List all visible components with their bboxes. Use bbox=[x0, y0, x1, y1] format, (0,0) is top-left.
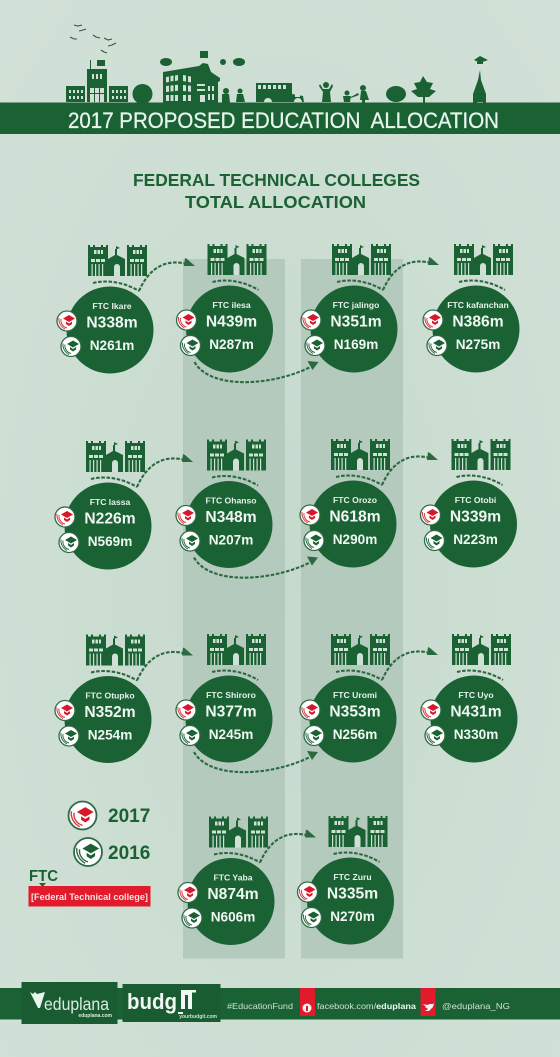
card: FTC Lassa: FTC lassa bbox=[90, 497, 131, 507]
arrow: Uromi to Uyo bbox=[382, 647, 438, 680]
logo: budgIT: yourbudgit.com bbox=[179, 1014, 218, 1020]
card: FTC Uyo: N431m bbox=[450, 704, 502, 720]
card: FTC Otobi: FTC Otobi bbox=[455, 495, 496, 505]
card: FTC Ikare bbox=[57, 245, 154, 374]
card: FTC Ohanso: FTC Ohanso bbox=[205, 496, 257, 506]
card: FTC Ohanso: N207m bbox=[209, 532, 253, 548]
card: FTC Uromi bbox=[300, 634, 396, 762]
card: FTC Kafanchan: N275m bbox=[456, 337, 500, 352]
card: FTC Otupko: N254m bbox=[88, 728, 132, 742]
card: FTC Yaba: N606m bbox=[211, 910, 255, 924]
legend item: 2017: 2017 bbox=[108, 806, 150, 827]
card: FTC Orozo bbox=[300, 439, 396, 568]
card: FTC Ohanso: N348m bbox=[205, 509, 257, 526]
card: FTC Ohanso bbox=[176, 440, 272, 568]
card: FTC Ilesa: N287m bbox=[209, 337, 254, 352]
heading bbox=[133, 170, 420, 212]
icon: main school building bbox=[163, 51, 220, 103]
icon: school bus bbox=[256, 83, 304, 106]
icon: college building bbox=[66, 60, 128, 102]
legend bbox=[28, 802, 150, 906]
card: FTC Otupko bbox=[55, 634, 152, 763]
card: FTC Otobi: N339m bbox=[450, 508, 501, 526]
card: FTC Ilesa bbox=[176, 244, 273, 372]
logo: eduplana: eduplana.com bbox=[78, 1013, 113, 1019]
icon: trees bbox=[386, 76, 436, 103]
card: FTC Yaba: FTC Yaba bbox=[213, 872, 253, 882]
card: FTC Uyo: FTC Uyo bbox=[458, 690, 494, 700]
card: FTC Shiroro bbox=[176, 634, 272, 762]
card: FTC Kafanchan bbox=[423, 244, 520, 372]
arrow: Ikare to Ilesa bbox=[139, 258, 195, 291]
card: FTC Zuru: N270m bbox=[330, 909, 375, 924]
card: FTC Otupko: FTC Otupko bbox=[85, 690, 135, 700]
heading: FEDERAL TECHNICAL COLLEGES bbox=[133, 170, 420, 190]
card: FTC Shiroro: N245m bbox=[209, 727, 253, 742]
card: FTC Jalingo: FTC jalingo bbox=[333, 300, 379, 310]
arrow: Shiroro to Uromi bbox=[194, 751, 318, 772]
facebook link: facebook.com/ eduplana bbox=[317, 1001, 416, 1011]
card: FTC Otobi bbox=[420, 439, 517, 568]
arrow: Otupko to Shiroro bbox=[137, 648, 193, 680]
icon: tree bbox=[132, 84, 152, 104]
panel: shaded column left bbox=[183, 259, 285, 958]
card: FTC Jalingo bbox=[301, 244, 398, 372]
icon: children with hands raised bbox=[319, 82, 369, 103]
twitter handle: @eduplana_NG bbox=[442, 1001, 510, 1011]
header illustration: skyline bbox=[66, 25, 488, 109]
card: FTC Zuru: N335m bbox=[327, 886, 378, 902]
header band with title: 2017 PROPOSED EDUCATION ALLOCATION bbox=[68, 108, 499, 133]
logo: eduplana: eduplana bbox=[44, 994, 109, 1014]
abbreviation label: Federal Technical college: [Federal Technical college] bbox=[31, 892, 148, 903]
arrow: Yaba to Zuru bbox=[260, 830, 316, 862]
card: FTC Ikare: N261m bbox=[90, 338, 134, 353]
card: FTC Lassa: N569m bbox=[88, 534, 132, 549]
logo: budgIT bbox=[122, 984, 220, 1022]
panel: shaded column right bbox=[301, 259, 403, 958]
card: FTC Otupko: N352m bbox=[84, 704, 136, 721]
card: FTC Uromi: FTC Uromi bbox=[333, 690, 377, 700]
arrow: Ilesa to Jalingo bbox=[194, 361, 318, 382]
card: FTC Ilesa: FTC ilesa bbox=[212, 300, 251, 310]
card: FTC Jalingo: N169m bbox=[334, 337, 378, 352]
icon: twitter bbox=[420, 988, 436, 1016]
logo: eduplana bbox=[22, 982, 118, 1024]
card: FTC Kafanchan: FTC kafanchan bbox=[447, 300, 509, 310]
card: FTC Shiroro: FTC Shiroro bbox=[206, 690, 256, 700]
icon: clouds bbox=[160, 58, 245, 66]
card: FTC Zuru: FTC Zuru bbox=[333, 872, 372, 882]
card: FTC Shiroro: N377m bbox=[205, 704, 257, 720]
icon: steeple with cap bbox=[473, 56, 488, 109]
card: FTC Ikare: FTC Ikare bbox=[92, 301, 132, 311]
card: FTC Lassa: N226m bbox=[84, 510, 136, 528]
heading: TOTAL ALLOCATION bbox=[185, 192, 366, 212]
legend item: 2016: 2016 bbox=[108, 843, 150, 864]
abbreviation: FTC: FTC bbox=[29, 868, 58, 885]
icon: birds bbox=[70, 25, 116, 53]
arrow: Orozo to Otobi bbox=[382, 452, 438, 485]
hashtag: #EducationFund bbox=[227, 1001, 293, 1011]
card: FTC Yaba bbox=[178, 816, 274, 945]
card: FTC Orozo: N618m bbox=[329, 508, 381, 526]
card: FTC Uromi: N353m bbox=[329, 704, 381, 720]
card: FTC Kafanchan: N386m bbox=[452, 314, 504, 330]
arrow: Lassa to Ohanso bbox=[137, 454, 193, 487]
arrow: Jalingo to Kafanchan bbox=[383, 257, 439, 290]
card: FTC Orozo: FTC Orozo bbox=[333, 495, 377, 505]
logo: budgIT: budg bbox=[127, 989, 177, 1014]
arrow: Ohanso to Orozo bbox=[194, 556, 318, 578]
card: FTC Ilesa: N439m bbox=[206, 314, 257, 330]
icon: facebook bbox=[300, 988, 315, 1016]
card: FTC Uyo: N330m bbox=[454, 727, 498, 742]
header band with title bbox=[0, 102, 560, 134]
card: FTC Otobi: N223m bbox=[453, 532, 498, 547]
card: FTC Uyo bbox=[421, 634, 518, 762]
card: FTC Orozo: N290m bbox=[333, 532, 377, 547]
card: FTC Ikare: N338m bbox=[86, 314, 138, 332]
card: FTC Yaba: N874m bbox=[207, 886, 259, 903]
icon: children walking bbox=[222, 88, 245, 103]
card: FTC Lassa bbox=[55, 441, 152, 570]
footer bbox=[0, 982, 560, 1024]
card: FTC Jalingo: N351m bbox=[330, 314, 382, 330]
card: FTC Zuru bbox=[298, 816, 394, 944]
card: FTC Uromi: N256m bbox=[333, 727, 377, 742]
